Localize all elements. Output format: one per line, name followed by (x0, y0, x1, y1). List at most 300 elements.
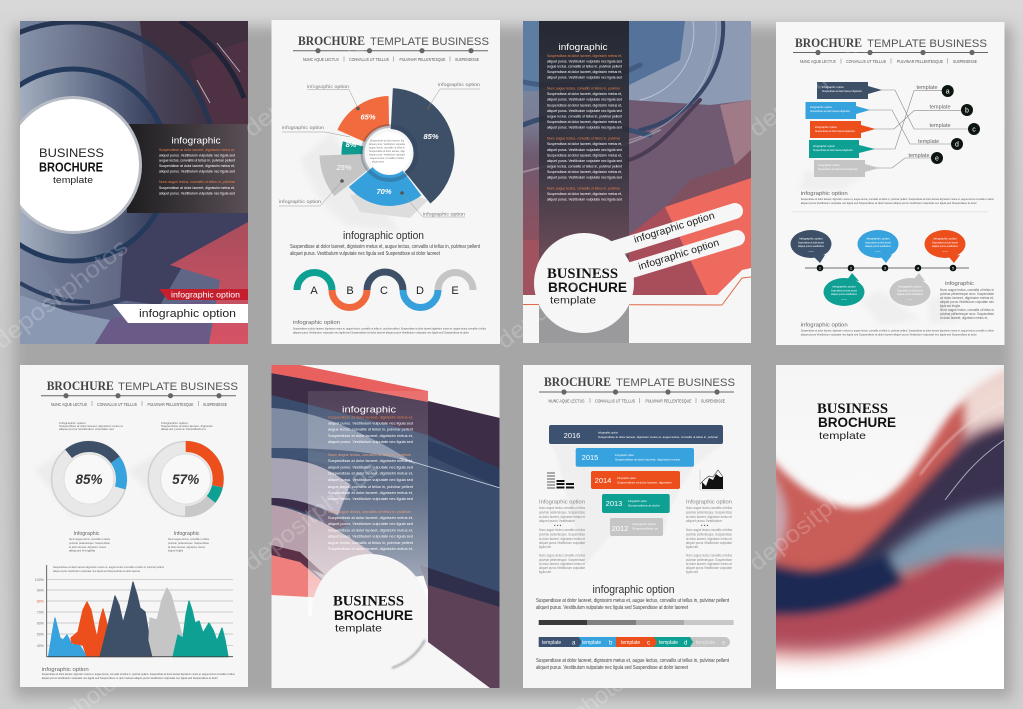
header: NUNC AQUE LECTUS (303, 57, 339, 62)
area chart: 80% (37, 600, 45, 604)
side text columns: aliquet purus Vestibulum (539, 519, 575, 523)
circle with title: BUSINESS (39, 146, 104, 160)
title (817, 401, 896, 442)
speech bubbles timeline: • • • (809, 250, 813, 254)
speech bubbles timeline: aliquet purus vestibulum (932, 244, 958, 248)
white ribbons: infographic option (637, 238, 721, 273)
white ribbons: infographic option (633, 211, 716, 246)
text block: infographic option: Suspendisse at dolor laoreet, dignissim metus et, augue lectus, convallis ut tellus in, pulvinar pellent (290, 244, 480, 250)
text block: infographic: infographic (172, 136, 221, 146)
speech bubbles timeline: 2 (850, 266, 853, 270)
header (539, 374, 735, 404)
side text columns: Nunc augue lectus convallis ut tellus (686, 528, 732, 532)
donut captions: Infographic option (161, 421, 188, 425)
text block: infographic: Nunc augue lectus, convallis ut tellus in, pulvinar (159, 180, 236, 184)
text block: infographic: Suspendisse at dolor laoreet, dignissim metus et, (547, 170, 622, 174)
text block: footer (42, 667, 235, 680)
speech bubbles timeline: Suspendisse at dolor laoreet (897, 288, 923, 292)
panel: timeline infographic (523, 365, 751, 688)
side text columns: ligula sed (686, 570, 698, 574)
text block: infographic: Suspendisse at dolor laoreet, dignissim metus et, (328, 434, 413, 438)
watermarks: depositphotos (239, 456, 383, 577)
text block: infographic: Suspendisse at dolor laoreet, dignissim metus et, (547, 104, 622, 108)
year bars: 2013 (606, 499, 622, 508)
side text columns: ligula sed (686, 545, 698, 549)
text block: bubbles caption: aliquet purus Vestibulum vulputate nec ligula sed Suspendisse at dolor laoreet aliquet purus Vestibulum vulputate nec ligula sed Suspendisse at dolor (801, 332, 977, 336)
donut captions: aliquet purus Vestibulum (161, 427, 207, 431)
pie chart: Suspendisse at dolor laoreet, dig (370, 138, 404, 142)
text block: callouts caption (801, 191, 994, 205)
side text columns: Nunc augue lectus convallis ut tellus (686, 506, 732, 510)
area chart: 50% (37, 632, 45, 636)
donut captions (59, 421, 213, 552)
template tabs: template (582, 640, 601, 646)
template tabs: template (542, 640, 561, 646)
template tabs: c (647, 640, 650, 646)
header: SUSPENDISSE (701, 398, 725, 404)
text block: infographic (159, 136, 236, 196)
text block: infographic: augue lectus, convallis ut tellus in, pulvinar pellent (159, 159, 235, 163)
speech bubbles timeline: Suspendisse at dolor laoreet (831, 288, 857, 292)
side text columns: at dolor laoreet, dignissim metus et (686, 515, 732, 519)
text block: infographic: aliquet purus. Vestibulum vulputate nec ligula sed (328, 522, 413, 526)
side text columns: • • • (701, 523, 709, 528)
text block: infographic: aliquet purus. Vestibulum vulputate nec ligula sed (547, 109, 622, 113)
callout arrows: infographic option (815, 125, 837, 129)
panel: pie infographic (272, 20, 500, 344)
year bars: Infographic option (615, 453, 634, 457)
side text columns: aliquet purus Vestibulum vulputate (539, 541, 585, 545)
side text columns: aliquet purus Vestibulum vulputate (686, 541, 732, 545)
callout arrows: infographic option (810, 105, 832, 109)
donut captions: aliquet fringilla (69, 548, 95, 552)
speech bubbles timeline: aliquet purus vestibulum (897, 292, 923, 296)
template tabs: template (696, 640, 715, 646)
pie labels: infographic option (279, 199, 321, 205)
red tag: infographic option (171, 290, 240, 300)
header (793, 35, 988, 64)
text block: infographic: Suspendisse at dolor laoreet, dignissim metus et, (159, 164, 235, 168)
pie chart: aliquet purus (372, 160, 384, 164)
header: PULVINAR PELLENTESQUE (400, 57, 446, 62)
footer text (293, 320, 486, 334)
connector lines (868, 90, 970, 168)
speech bubbles timeline: Suspendisse at dolor laoreet (798, 240, 824, 244)
circle with title (312, 554, 428, 670)
speech bubbles timeline: • • • (842, 298, 846, 302)
side text columns: • • • (554, 523, 562, 528)
header: NUNC AQUE LECTUS (800, 59, 836, 64)
template markers (908, 85, 980, 164)
text block: footer: aliquet purus Vestibulum vulputate nec ligula sed Suspendisse at dolor laoreet aliquet purus Vestibulum vulputate nec ligula sed Suspendisse at dolor (42, 676, 218, 680)
template markers: template (929, 123, 951, 129)
speech bubbles timeline: infographic option (933, 236, 957, 240)
donut captions: pulvinar pellentesque. Suspendisse (168, 541, 209, 545)
side text columns: at dolor laoreet, dignissim metus et (686, 537, 732, 541)
text block: infographic: aliquet purus. Vestibulum vulputate nec ligula sed (328, 422, 413, 426)
title: BROCHURE (818, 415, 896, 430)
template tabs: a (572, 640, 576, 646)
header: SUSPENDISSE (203, 402, 227, 407)
header: BROCHURE (47, 378, 114, 393)
pie chart: 85% (423, 132, 439, 141)
callout arrows: infographic option (822, 85, 844, 89)
text block: footer: aliquet purus. Vestibulum vulputate nec ligula sed Suspendisse at dolor laoreet (536, 665, 688, 671)
side text columns: at dolor laoreet, dignissim metus et (539, 562, 585, 566)
text block: infographic: aliquet purus. Vestibulum vulputate nec ligula sed (328, 440, 413, 444)
donut 85%: 85% (75, 472, 103, 487)
circle with title: template (335, 623, 382, 635)
text block: infographic: augue lectus, convallis ut tellus in, pulvinar pellent (547, 65, 622, 69)
text block: infographic option: aliquet purus. Vestibulum vulputate nec ligula sed Suspendisse at dolor laoreet (290, 251, 440, 257)
template markers: a (946, 88, 950, 96)
speech bubbles timeline: 4 (917, 266, 920, 270)
side text columns (539, 500, 732, 574)
donut 57% (128, 433, 231, 525)
template markers: template (908, 153, 930, 159)
side text columns: aliquet purus Vestibulum vulputate (539, 566, 585, 570)
header: PULVINAR PELLENTESQUE (897, 59, 943, 64)
text block: infographic: Suspendisse at dolor laoreet, dignissim metus et, (547, 70, 622, 74)
side text columns: pulvinar pellentesque. Suspendisse (686, 510, 732, 514)
circle with title: template (53, 175, 93, 185)
text block: infographic: Suspendisse at dolor laoreet, dignissim metus et, (547, 142, 622, 146)
speech bubbles timeline: aliquet purus vestibulum (798, 244, 824, 248)
footer text: aliquet purus Vestibulum vulputate nec ligula sed Suspendisse at dolor laoreet aliquet purus Vestibulum vulputate nec ligula sed Suspendisse at dolor (293, 330, 469, 334)
year bars: 2014 (595, 476, 611, 485)
donut captions: aliquet purus Vestibulum vulputate nec (59, 427, 115, 431)
wave A to E: C (380, 285, 388, 297)
pie chart: 70% (376, 187, 392, 196)
area chart: 100% (35, 578, 45, 582)
template tabs: template (659, 640, 678, 646)
callout arrows: Suspendisse at dolor laoreet dignissim (813, 148, 853, 152)
pie chart (300, 85, 458, 232)
donut captions: Infographic option (59, 421, 86, 425)
panel: callouts and bubbles (776, 22, 1004, 345)
speech bubbles timeline: • • • (876, 250, 880, 254)
area chart: 90% (37, 588, 45, 592)
text block: infographic option: infographic option (592, 584, 674, 596)
footer text: Suspendisse at dolor laoreet, dignissim metus et, augue lectus, convallis ut tellus in, pulvinar pellent. Suspendisse at dolor laoreet dignissim metus et, augue lectus convallis ut tellus (293, 326, 486, 330)
template tabs: d (684, 640, 687, 646)
donut captions: aliquet fringilla (168, 548, 183, 552)
icon: rising chart (700, 470, 724, 490)
wave A to E: B (346, 285, 354, 297)
template markers: template (929, 104, 951, 110)
side text columns: pulvinar pellentesque. Suspendisse (539, 510, 585, 514)
panel: cover with dark column (523, 21, 751, 343)
pie labels: infographic option (282, 125, 324, 131)
circle with title: BROCHURE (39, 160, 103, 174)
circle with title (20, 96, 142, 234)
year bars: Suspendisse at dolor laoreet, dignissim metus (615, 458, 681, 462)
text block: infographic: aliquet purus. Vestibulum vulputate nec ligula sed (547, 76, 622, 80)
wave A to E: A (310, 285, 318, 297)
footer text: infographic option (293, 320, 340, 326)
header: CONVALLIS UT TELLUS (846, 59, 886, 64)
text block: infographic: aliquet purus. Vestibulum vulputate nec ligula sed (328, 534, 413, 538)
side text columns: Nunc augue lectus convallis ut tellus (686, 554, 732, 558)
year bars: 2015 (582, 453, 598, 462)
text block: infographic: Suspendisse at dolor laoreet, dignissim metus et, (328, 416, 413, 420)
speech bubbles timeline: infographic option (898, 284, 922, 288)
circle with title: BUSINESS (547, 266, 618, 282)
text block: infographic option: infographic option (343, 230, 424, 242)
text block: infographic option: aliquet purus. Vestibulum vulputate nec ligula sed Suspendisse at dolor laoreet (536, 605, 688, 611)
text block: infographic right: pulvinar pellentesque nunc. Suspendisse (940, 292, 994, 296)
donut captions: Infographic (74, 531, 100, 537)
side text columns: pulvinar pellentesque. Suspendisse (539, 532, 585, 536)
text block: infographic: Suspendisse at dolor laoreet, dignissim metus et, (328, 547, 413, 551)
white tag: infographic option (139, 308, 236, 320)
side text columns: Nunc augue lectus convallis ut tellus (539, 554, 585, 558)
text block: infographic: Suspendisse at dolor laoreet, dignissim metus et, (328, 528, 413, 532)
speech bubbles timeline: Suspendisse at dolor laoreet (865, 240, 891, 244)
header: SUSPENDISSE (455, 57, 479, 62)
text block: infographic: infographic (342, 404, 396, 416)
circle with title: BROCHURE (334, 608, 413, 623)
callout arrows: Suspendisse at dolor laoreet dignissim (818, 167, 858, 171)
year bars: Infographic option (632, 522, 656, 526)
text block: infographic: augue lectus, convallis ut tellus in, pulvinar pellent (328, 541, 414, 545)
pie chart: augue lectus, convallis ut tellus in (369, 146, 405, 150)
text block: infographic: augue lectus, convallis ut tellus in, pulvinar pellent (328, 485, 414, 489)
side text columns: ligula sed (539, 570, 551, 574)
side text columns: pulvinar pellentesque. Suspendisse (686, 532, 732, 536)
text block: footer: infographic option (42, 667, 89, 673)
watermarks: depositphotos (744, 22, 888, 143)
icon: bar stacks (547, 472, 574, 489)
pie labels: infographic option (438, 82, 480, 88)
text block: infographic: aliquet purus. Vestibulum vulputate nec ligula sed (328, 478, 413, 482)
text block: infographic: aliquet purus. Vestibulum vulputate nec ligula sed (547, 159, 622, 163)
speech bubbles timeline: Suspendisse at dolor laoreet (932, 240, 958, 244)
wave A to E: D (416, 285, 424, 297)
text block: infographic: Nunc augue lectus, convallis ut tellus in, pulvinar (547, 186, 621, 190)
donut captions: Suspendisse at dolor laoreet, dignissim (161, 424, 213, 428)
text block: infographic: aliquet purus. Vestibulum vulputate nec ligula sed (159, 192, 235, 196)
year bars: Suspendisse at dolor laoreet, dignissim metus et, augue lectus, convallis ut tellus in, pulvinar (598, 435, 718, 439)
speech bubbles timeline: • • • (908, 298, 912, 302)
panel: cover with diagonal bands (272, 365, 500, 688)
side text columns: at dolor laoreet, dignissim metus et (686, 562, 732, 566)
donut captions: Infographic (174, 531, 200, 537)
side text columns: pulvinar pellentesque. Suspendisse (539, 558, 585, 562)
callout arrows: infographic option (813, 144, 835, 148)
panel: cover with blurred wave (776, 365, 1004, 689)
text block: infographic right: pulvinar pellentesque nunc. Suspendisse (940, 312, 994, 316)
wave A to E (297, 272, 473, 308)
header: TEMPLATE BUSINESS (118, 381, 238, 393)
year bars: Infographic option (628, 499, 647, 503)
text block: footer: Suspendisse at dolor laoreet, dignissim metus et, augue lectus, convallis ut tellus in, pulvinar pellent (536, 658, 729, 664)
donut captions: pulvinar pellentesque. Suspendisse (69, 541, 110, 545)
speech bubbles timeline: infographic option (799, 236, 823, 240)
text block: infographic (547, 42, 622, 202)
side text columns: at dolor laoreet, dignissim metus et (539, 537, 585, 541)
donut captions: at dolor laoreet, dignissim metus (69, 545, 106, 549)
text block: infographic: augue lectus, convallis ut tellus in, pulvinar pellent (547, 114, 622, 118)
text block: infographic: aliquet purus. Vestibulum vulputate nec ligula sed (159, 169, 235, 173)
header: SUSPENDISSE (953, 59, 977, 64)
area chart: 60% (37, 622, 45, 626)
text block: infographic option (290, 230, 480, 257)
callout arrows (800, 82, 882, 190)
text block: infographic right: ligula sed fringilla (940, 304, 960, 308)
text block: infographic: aliquet purus. Vestibulum vulputate nec ligula sed (547, 176, 622, 180)
area chart (35, 565, 233, 657)
text block: infographic: Suspendisse at dolor laoreet, dignissim metus et, (159, 148, 235, 152)
template markers: d (955, 142, 959, 148)
pie labels: infographic option (307, 84, 349, 90)
text block: infographic right: at dolor laoreet, dignissim metus et, (940, 296, 994, 300)
text block: infographic: Suspendisse at dolor laoreet, dignissim metus et, (547, 54, 622, 58)
template markers: b (965, 108, 969, 114)
speech bubbles timeline: • • • (943, 250, 947, 254)
text block: infographic: aliquet purus. Vestibulum vulputate nec ligula sed (547, 148, 622, 152)
text block: callouts caption: aliquet purus Vestibulum vulputate nec ligula sed Suspendisse at dolor laoreet aliquet purus Vestibulum vulputate nec ligula sed Suspendisse at dolor (801, 201, 977, 205)
text block: infographic: Suspendisse at dolor laoreet, dignissim metus et, (547, 192, 622, 196)
area chart: Suspendisse at dolor laoreet dignissim metus et, augue lectus convallis ut tellus in pulvinar pellent (53, 565, 164, 569)
text block: infographic right: at dolor laoreet, dignissim metus et, (940, 316, 988, 320)
header (41, 378, 238, 407)
text block: infographic: Suspendisse at dolor laoreet, dignissim metus et, (328, 491, 413, 495)
year bars: Infographic option (598, 430, 618, 434)
text block: infographic: Nunc augue lectus, convallis ut tellus in, pulvinar (547, 86, 621, 90)
year bars: 2012 (612, 524, 628, 533)
pie chart: 25% (335, 163, 352, 172)
callout arrows: Suspendisse at dolor laoreet dignissim (822, 89, 862, 93)
pie labels (279, 82, 480, 218)
template markers: template (916, 85, 938, 91)
text block: infographic: aliquet purus. Vestibulum vulputate nec ligula sed (547, 98, 622, 102)
circle with title: BROCHURE (548, 280, 627, 295)
text block: footer (536, 658, 729, 671)
pie chart: aliquet purus. Vestibulum vulputate (369, 142, 405, 146)
year bars: Suspendisse at dolor laoreet, dignissim (617, 480, 673, 484)
callout arrows: infographic option (818, 163, 840, 167)
donut captions: Nunc augue lectus, convallis ut tellus (69, 537, 110, 541)
text block: infographic: aliquet purus. Vestibulum vulputate nec ligula sed (547, 59, 622, 63)
title: BUSINESS (817, 401, 888, 417)
speech bubbles timeline: infographic option (832, 284, 856, 288)
header: TEMPLATE BUSINESS (616, 377, 735, 389)
header: CONVALLIS UT TELLUS (595, 398, 635, 404)
template tabs: b (609, 640, 613, 646)
template markers: e (935, 156, 939, 162)
side text columns: Infographic option (686, 500, 732, 506)
watermarks: depositphotos (492, 234, 636, 355)
text block: infographic: aliquet purus. Vestibulum vulputate nec ligula sed (328, 466, 413, 470)
circle with title: template (550, 294, 596, 306)
speech bubbles timeline (790, 230, 969, 325)
text block: infographic: Suspendisse at dolor laoreet, dignissim metus et, (328, 516, 413, 520)
watermarks: depositphotos (744, 456, 888, 577)
header: PULVINAR PELLENTESQUE (646, 398, 692, 404)
text block: infographic right: Nunc augue lectus, convallis ut tellus in (940, 308, 994, 312)
speech bubbles timeline: aliquet purus vestibulum (865, 244, 891, 248)
header: CONVALLIS UT TELLUS (349, 57, 389, 62)
white ribbons (610, 211, 737, 273)
year bars: Suspendisse at dolor (628, 504, 660, 508)
text block: infographic: Nunc augue lectus, convallis ut tellus in, pulvinar (547, 136, 621, 140)
text block: infographic right: aliquet purus Vestibulum vulputate nec (940, 300, 994, 304)
title: template (819, 430, 866, 442)
side text columns: at dolor laoreet, dignissim metus et (539, 515, 585, 519)
template tabs (539, 637, 730, 647)
side text columns: aliquet purus Vestibulum vulputate (686, 566, 732, 570)
text block: infographic: Suspendisse at dolor laoreet, dignissim metus et, (547, 154, 622, 158)
text block: infographic: Nunc augue lectus, convallis ut tellus in, pulvinar (328, 510, 412, 514)
wave A to E: E (451, 285, 459, 297)
template markers: c (972, 126, 976, 134)
watermarks: depositphotos (239, 22, 383, 143)
template tabs: template (621, 640, 640, 646)
header: CONVALLIS UT TELLUS (97, 402, 137, 407)
side text columns: aliquet purus Vestibulum (686, 519, 722, 523)
header: PULVINAR PELLENTESQUE (148, 402, 194, 407)
header (293, 33, 489, 62)
text block: footer: Suspendisse at dolor laoreet, dignissim metus et, augue lectus, convallis ut tellus in, pulvinar pellent. Suspendisse at dolor laoreet dignissim metus et, augue lectus convallis ut tellus (42, 672, 235, 676)
text block: infographic right: infographic (945, 281, 975, 287)
circle with title: BUSINESS (333, 594, 404, 610)
text block: infographic right (940, 281, 994, 320)
callout arrows: Suspendisse at dolor laoreet dignissim (815, 129, 855, 133)
area chart: 40% (37, 644, 45, 648)
year bars (549, 425, 723, 565)
text block: infographic: aliquet purus. Vestibulum vulputate nec ligula sed (159, 153, 235, 157)
red tag (159, 289, 248, 300)
donut captions: at dolor laoreet, dignissim metus (168, 545, 205, 549)
donut 85% (35, 433, 135, 525)
year bars: Suspendisse at (632, 526, 658, 530)
pie chart: 8% (346, 140, 357, 149)
area chart: aliquet purus Vestibulum vulputate nec ligula sed Suspendisse at dolor laoreet (53, 569, 140, 573)
text block: infographic: Suspendisse at dolor laoreet, dignissim metus et, (159, 186, 235, 190)
text block: bubbles caption: infographic option (801, 322, 848, 328)
header: NUNC AQUE LECTUS (51, 402, 87, 407)
progress bar (539, 620, 734, 625)
speech bubbles timeline: infographic option (866, 236, 890, 240)
side text columns: Nunc augue lectus convallis ut tellus (539, 506, 585, 510)
text block: infographic: augue lectus, convallis ut tellus in, pulvinar pellent (328, 428, 414, 432)
text block: infographic option: Suspendisse at dolor laoreet, dignissim metus et, augue lectus, convallis ut tellus in, pulvinar pellent (536, 598, 729, 604)
side text columns: Infographic option (539, 500, 585, 506)
pie labels: infographic option (423, 212, 465, 218)
white tag (113, 304, 248, 323)
text block: infographic option (536, 584, 729, 611)
header: BROCHURE (795, 35, 862, 50)
panel: cover with circle (0, 21, 248, 344)
template tabs: e (722, 640, 726, 646)
header: NUNC AQUE LECTUS (548, 398, 584, 404)
year bars: Infographic option (617, 476, 636, 480)
speech bubbles timeline: aliquet purus vestibulum (831, 292, 857, 296)
text block: bubbles caption (801, 322, 994, 336)
pie chart: aliquet purus. Vestibulum vulputate (369, 152, 405, 156)
text block: infographic: Suspendisse at dolor laoreet, dignissim metus et, (328, 472, 413, 476)
translucent column (308, 391, 428, 616)
side text columns: pulvinar pellentesque. Suspendisse (686, 558, 732, 562)
text block: callouts caption: infographic option (801, 191, 848, 197)
pie chart: augue lectus, convallis ut tellus (370, 156, 404, 160)
year bars: 2016 (564, 431, 580, 440)
donut 57%: 57% (172, 472, 199, 487)
speech bubbles timeline: 5 (952, 266, 955, 270)
panel: donuts and area chart (20, 365, 248, 687)
callout arrows: Suspendisse at dolor laoreet dignissim (810, 109, 850, 113)
